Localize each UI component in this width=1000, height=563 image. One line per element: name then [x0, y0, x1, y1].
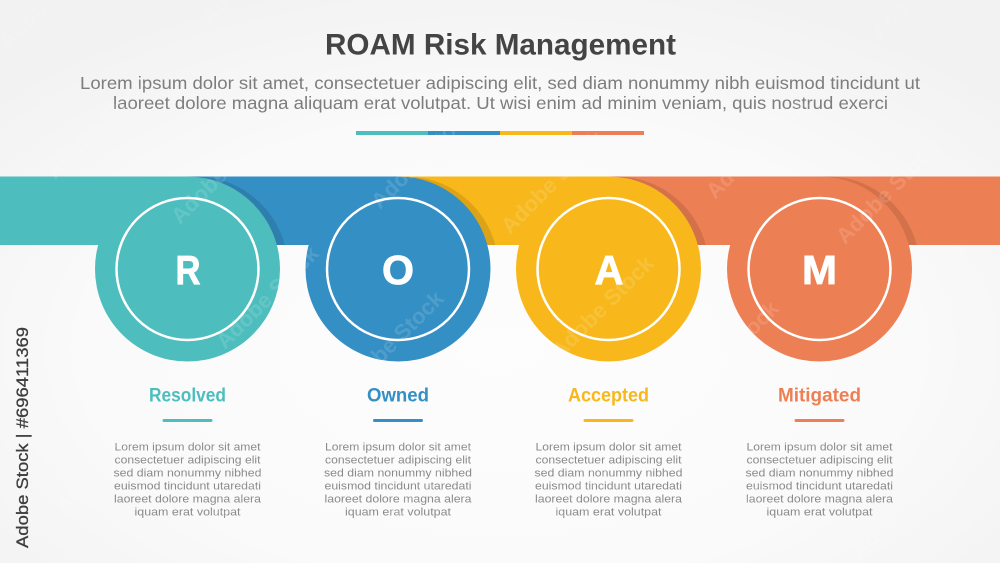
panel: Resolved description: [114, 386, 262, 518]
panel: Accepted description: iquam erat volutpat: [556, 506, 662, 518]
watermark pattern: Adobe Stock: [496, 125, 609, 239]
panel: Owned description: Lorem ipsum dolor sit amet: [325, 442, 471, 454]
panel: Resolved description: iquam erat volutpat: [134, 506, 240, 518]
panel: Owned description: iquam erat volutpat: [345, 506, 451, 518]
watermark pattern: Adobe Stock: [166, 115, 279, 229]
watermark pattern: Adobe Stock: [336, 285, 449, 399]
panel: Mitigated description: euismod tincidunt utaredati: [746, 480, 893, 492]
panel: Accepted description: consectetuer adipiscing elit: [536, 454, 682, 466]
panel: M step band and circle: [600, 176, 1000, 362]
watermark pattern: Adobe Stock: [846, 450, 959, 563]
panel: R step band and circle: R: [176, 247, 200, 293]
panel: Owned description: laoreet dolore magna alera: [324, 494, 472, 506]
panel: Mitigated description: iquam erat volutpat: [766, 506, 872, 518]
panel: Resolved description: Lorem ipsum dolor sit amet: [114, 442, 260, 454]
panel: Mitigated description: laoreet dolore magna alera: [746, 494, 894, 506]
watermark pattern: Adobe Stock: [701, 90, 814, 204]
panel: Resolved description: sed diam nonummy nibhed: [114, 468, 262, 480]
watermark pattern: Adobe Stock: [831, 135, 944, 249]
watermark pattern: Adobe Stock: [41, 70, 154, 184]
panel: R step band and circle: [0, 176, 288, 362]
panel: Accepted description: [534, 386, 683, 518]
panel: Resolved description: Resolved: [149, 386, 226, 406]
panel: Accepted description: sed diam nonummy nibhed: [534, 468, 682, 480]
watermark pattern: Adobe Stock: [506, 450, 619, 563]
panel: M step band and circle: M: [802, 247, 837, 293]
watermark pattern: Adobe Stock: [671, 295, 784, 409]
panel: Accepted description: Lorem ipsum dolor sit amet: [536, 442, 682, 454]
subtitle text: laoreet dolore magna aliquam erat volutpat. Ut wisi enim ad minim veniam, quis nostrud exerci: [113, 93, 888, 113]
panel: Owned description: euismod tincidunt utaredati: [324, 480, 472, 492]
subtitle text: Lorem ipsum dolor sit amet, consectetuer adipiscing elit, sed diam nonummy nibh euismod tincidunt ut: [80, 73, 920, 93]
panel: Resolved description: euismod tincidunt utaredati: [114, 480, 261, 492]
watermark pattern: Adobe Stock: [211, 240, 324, 354]
stock id vertical label: Adobe Stock | #696411369: [13, 327, 32, 548]
watermark pattern: Adobe Stock: [876, 260, 989, 374]
panel: Owned description: sed diam nonummy nibhed: [324, 468, 472, 480]
title divider: four-colour bar: [356, 131, 644, 135]
panel: Owned description: [324, 386, 472, 518]
watermark pattern: Adobe Stock: [366, 100, 479, 214]
watermark pattern: Adobe Stock: [381, 415, 494, 529]
panel: Owned description: consectetuer adipiscing elit: [325, 454, 471, 466]
panel: Mitigated description: consectetuer adipiscing elit: [746, 454, 892, 466]
watermark pattern: Adobe Stock: [51, 405, 164, 519]
watermark pattern: Adobe Stock: [546, 250, 659, 364]
panel: Accepted description: euismod tincidunt utaredati: [535, 480, 682, 492]
panel: Accepted description: laoreet dolore magna alera: [535, 494, 683, 506]
panel: Mitigated description: [746, 386, 894, 518]
panel: A step band and circle: A: [594, 247, 624, 293]
panel: Owned description: Owned: [367, 386, 429, 406]
watermark pattern: Adobe Stock: [716, 420, 829, 534]
panel: A step band and circle: [390, 176, 709, 362]
panel: Mitigated description: Mitigated: [778, 386, 861, 406]
panel: Mitigated description: sed diam nonummy nibhed: [746, 468, 894, 480]
panel: Accepted description: Accepted: [568, 386, 649, 406]
watermark pattern: Adobe Stock: [176, 445, 289, 559]
panel: Resolved description: laoreet dolore magna alera: [114, 494, 262, 506]
title: ROAM Risk Management: [325, 28, 676, 62]
subtitle text: [80, 73, 920, 113]
panel: O step band and circle: [180, 176, 498, 362]
panel: Resolved description: consectetuer adipiscing elit: [114, 454, 260, 466]
panel: O step band and circle: O: [382, 247, 414, 293]
panel: Mitigated description: Lorem ipsum dolor sit amet: [746, 442, 892, 454]
